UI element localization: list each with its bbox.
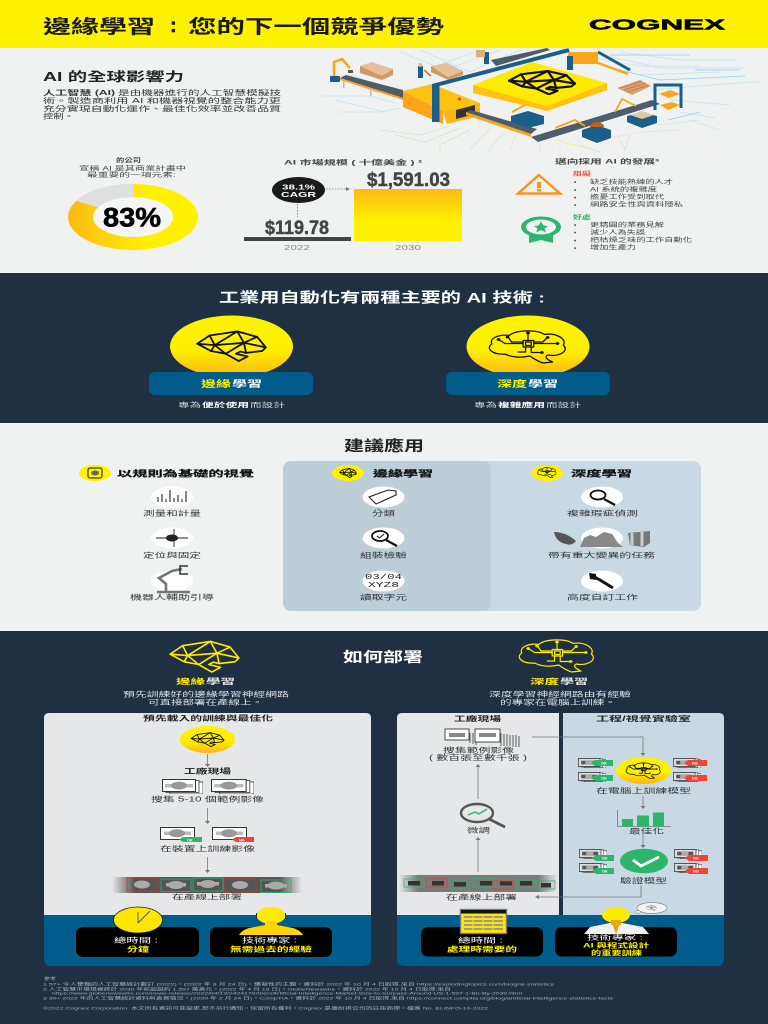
card: deep learning [446,316,610,409]
title: 您的下一個競爭優勢 [188,15,444,38]
item: robot guidance: 機器人輔助引導 [130,592,214,602]
column header: 深度學習 [571,468,632,478]
intro text: 控制。 [43,112,74,120]
card: edge learning: 邊緣 [201,378,231,389]
barriers list [573,170,683,209]
panel: edge learning applications background [283,461,491,611]
robot arm: left [330,59,353,82]
benefits list: • [574,231,576,237]
references: https://www.globenewswire.com/news-release/2022/04/19/2424179/0/en/Artificial-Intelligence-Market-Size-to-Surpass-Around-US-1-597-1-Bn-By-2030.html [52,990,522,995]
item: positioning [143,528,201,560]
references: 1 57+ 令人驚豔的人工智慧統計數訂 (2022)。(2022 年 8 月 24 日)。爆發性的主題。資料於 2022 年 10 月 4 日取得,來自 https://explodingtopics.com/blog/ai-statistics [43,980,554,986]
panel: how to deploy [0,631,768,1024]
bar 2030 [354,170,462,252]
item: character reading [360,570,407,602]
panel: deep learning workflow [397,713,724,966]
card: deep learning: 而設計 [546,400,582,409]
production line belt [399,875,557,902]
bar 2022 [244,218,351,252]
machine housing [403,84,480,124]
arrow up [476,764,480,799]
training group: OK [601,776,607,780]
barriers list: • [574,188,576,194]
training group: NG [692,776,698,780]
column heading: deep learning: 深度學習神經網路由有經驗 [489,690,631,698]
training images [160,828,255,853]
arrow [205,808,210,824]
lab side: 工程/視覺實驗室 [596,714,691,723]
factory side [399,714,641,902]
benefits list: 增加生產力 [590,244,636,252]
column heading: deep learning: 深度 [530,676,560,686]
chart: optimize [618,810,671,836]
example images: 搜集 5-10 個範例影像 [151,794,264,804]
validation group: OK [602,856,608,860]
title: 邊緣學習 [43,16,155,38]
factory side: 工廠現場 [454,714,501,723]
item: measurement: 測量和計量 [143,508,201,518]
card: edge learning: 學習 [232,378,262,389]
icon: expert in lab coat [584,907,649,934]
thought bubble [636,902,667,914]
donut caption: 最重要的一項元素: [87,171,177,179]
column: deep learning [531,465,655,602]
info: expertise: AI 與程式設計 [583,940,650,950]
validation group: NG [693,870,699,874]
training images: OK [187,838,193,842]
benefits list: 減少人為失誤 [590,228,645,236]
training group: 在電腦上訓練模型 [596,786,691,795]
panel: AI adoption [518,156,692,252]
example images [151,780,264,804]
illustration: smart factory [322,48,760,156]
CAGR bubble: CAGR [281,192,316,199]
donut caption: 的公司 [116,156,141,164]
card: edge learning: 專為 [178,400,202,409]
barriers list: • [574,196,576,202]
conveyors: lower [466,99,660,142]
column heading: edge learning: 預先訓練好的邊緣學習神經網路 [123,690,289,698]
info: expertise: 技術專家 : [587,932,643,942]
benefits list: 更精闢的業務見解 [590,221,664,229]
benefits list: • [574,246,576,252]
heading: global impact: AI 的全球影響力 [43,69,184,84]
CAGR bubble: 38.1% [282,184,316,192]
chart title: AI 市場規模 ( 十億美金 ) ² [284,158,424,166]
item: robot guidance [130,566,214,602]
info: expertise [555,907,677,957]
title: : [170,15,177,37]
item: customized work: 高度自訂工作 [567,592,638,602]
intro text: 充分實現自動化運作、最佳化效率並改善品質 [43,104,281,113]
bar 2022: 2022 [284,245,310,252]
donut chart: 83%: 83% [103,202,161,232]
example image stacks: 搜集範例影像 [443,746,514,754]
column heading: edge learning: 學習 [206,676,235,686]
item: character reading: 03/04 [365,574,403,582]
card: edge learning [149,316,313,409]
machine stations [511,85,681,143]
item: defect detection: 複雜瑕疵偵測 [567,508,638,518]
title [43,15,444,38]
arrow to training [532,737,646,756]
barriers list: • [574,180,576,186]
benefits list: 好處 [573,214,591,222]
training group [578,757,707,795]
barriers list: 擔憂工作受到取代 [590,193,664,201]
donut caption: 宣稱 AI 是其商業計畫中 [79,164,186,172]
bar 2030: $1,591.03 [367,170,450,191]
validation group [579,849,708,885]
arrow [640,835,646,848]
barriers list: 網路安全性與資料隱私 [590,201,683,209]
info: time: 總時間 : [114,936,158,944]
info: time: 處理時需要的 [447,944,517,954]
bar 2022: $119.78 [265,218,329,239]
icon: edge brain [180,726,235,753]
benefits list: • [574,238,576,244]
panel: deep learning applications background [283,461,701,611]
icon: fine tuning magnifier: 微調 [467,826,490,834]
section heading: 如何部署 [343,649,423,665]
training images: 在裝置上訓練影像 [160,844,255,853]
chart: optimize: 最佳化 [629,826,664,836]
logo: Cognex: COGNEX [589,18,726,34]
production line belt: 在產線上部署 [172,892,243,901]
example image stacks: ( 數百張至數千張 ) [429,753,527,762]
arrow [205,857,210,873]
barriers list: 缺乏技能熟練的人才 [590,178,673,186]
column heading: edge learning [123,641,289,706]
item: positioning: 定位與固定 [143,550,201,560]
card: deep learning: 深度 [497,378,527,389]
icon: award badge [521,216,561,243]
info: time: 總時間 : [458,936,503,944]
barriers list: 阻礙 [573,170,591,178]
intro text: 術。製造商利用 AI 和機器視覺的整合能力更 [43,96,281,105]
beam and top conveyors [432,48,630,86]
training images: NG [239,838,245,842]
column header: 以規則為基礎的視覺 [117,468,255,478]
column: rule-based vision [79,465,255,602]
donut caption [79,156,186,179]
icon: warning triangle [518,175,560,194]
info: expertise: 無需過去的經驗 [230,944,312,954]
references: ©2022 Cognex Corporation. 本文所有資訊可能變更,恕不另行通知。保留所有權利。Cognex 是康耐視公司的註冊商標。檔案 No. ELINFO-10-2022 [43,1004,489,1010]
card: deep learning: 學習 [528,378,558,389]
card: deep learning: 專為 [474,400,498,409]
item: character reading: XYZ8 [368,582,399,590]
item: measurement [143,486,201,518]
arrow [640,796,646,809]
item: variable tasks: 帶有重大變異的任務 [548,550,655,560]
conveyor: left [340,75,403,100]
info: time [421,910,543,956]
production line belt [112,877,302,901]
bar chart: AI market size [244,158,462,252]
item: classification: 分類 [372,508,395,518]
panel: two AI technologies [0,273,768,423]
arrow [205,754,210,767]
production line belt: 在產線上部署 [446,892,517,902]
item: assembly check: 組裝檢驗 [360,550,407,560]
panel: edge learning workflow: 預先載入的訓練與最佳化 [143,714,273,722]
barriers list: • [574,203,576,209]
benefits list: • [574,223,576,229]
info: expertise [210,907,332,957]
example image stacks [429,729,527,762]
card: edge learning: 而設計 [250,400,286,409]
info: expertise: 技術專家 : [242,936,297,944]
arrow back to line [535,885,641,899]
boxes on pallets [360,62,651,95]
icon: fine tuning magnifier [461,804,505,834]
arrow up [476,837,480,872]
card: deep learning: 複雜應用 [498,400,545,409]
benefits list [573,214,692,252]
card: edge learning: 便於使用 [202,400,249,409]
column header [79,465,255,481]
adoption heading: 邁向採用 AI 的發展³ [555,156,660,166]
lab side [532,714,708,914]
donut chart: 83% [68,156,198,250]
info: time [76,907,199,957]
intro text [43,88,281,120]
references [43,975,613,1010]
validation group: OK [602,870,608,874]
references: 參考 [44,975,56,981]
column: edge learning [332,465,433,602]
main yellow chip [473,62,607,111]
column heading: edge learning: 可直接部署在產線上。 [148,698,263,706]
info: expertise: 的重要訓練 [591,948,643,957]
icon: spreadsheet [460,910,506,934]
info: time: 分鐘 [127,944,149,954]
intro text: 人工智慧 (AI) [43,88,115,97]
training group: NG [692,762,698,766]
section heading: 工業用自動化有兩種主要的 AI 技術 : [219,290,545,306]
column heading: deep learning: 學習 [560,676,588,686]
panel: edge learning workflow [44,713,371,966]
column header: 邊緣學習 [373,468,433,478]
training group: OK [601,762,607,766]
item: character reading: 讀取字元 [360,592,407,602]
references: 2 人工智慧市場規模將於 2030 年前超越約 1,597 萬美元。(2022 年 4 月 19 日)。GlobeNewswire。資料於 2022 年 10 月 4 日取得,來自 [43,985,451,991]
bar 2030: 2030 [395,245,421,252]
header band [0,0,768,48]
benefits list: 把枯燥乏味的工作自動化 [590,236,692,244]
column heading: edge learning: 邊緣 [176,676,206,686]
panel: edge learning workflow: 工廠現場 [184,766,231,776]
barriers list: AI 系統的複雜度 [590,186,657,194]
column heading: deep learning: 的專家在電腦上訓練。 [500,698,616,706]
heading: recommended applications: 建議應用 [344,437,424,455]
CAGR bubble [272,177,325,203]
column heading: deep learning [489,640,631,706]
intro text: 是由機器進行的人工智慧模擬技 [118,88,281,97]
validation group: NG [693,856,699,860]
references: 3 30+ 2022 年的人工智慧統計資料與真實情況。(2020 年 2 月 24 日)。CompTIA。資料於 2022 年 10 月 4 日取得,來自 https://connect.comptia.org/blog/artificial-intelligence-statistics-facts [43,994,613,1000]
validation group: 驗證模型 [620,876,667,885]
